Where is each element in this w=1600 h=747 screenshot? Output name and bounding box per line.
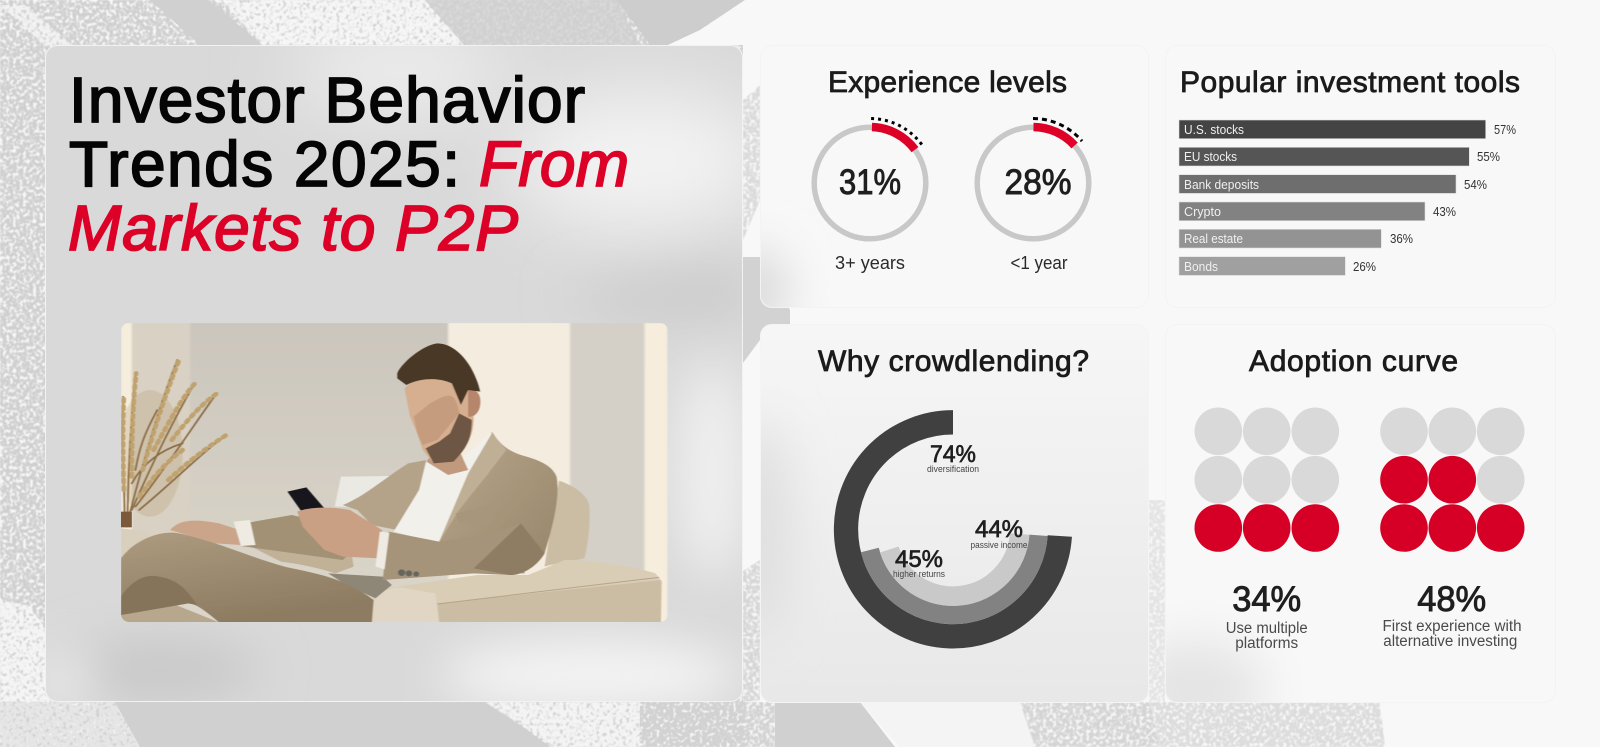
bar chart: Real estate — [1184, 232, 1243, 246]
stat: 34% use multiple platforms: Use multiple — [1226, 620, 1308, 637]
gauge: 28% less than 1 year: 28% — [1004, 163, 1072, 202]
bar chart: U.S. stocks — [1184, 123, 1244, 137]
bar chart: 55% — [1477, 150, 1500, 164]
radial chart: 45% — [895, 546, 943, 573]
dot grid: 48% — [1380, 408, 1524, 552]
bar chart: EU stocks — [1184, 150, 1237, 164]
stat: 48% first experience with alternative investing: alternative investing — [1383, 633, 1517, 650]
stat: 48% first experience with alternative investing: 48% — [1417, 580, 1486, 619]
panel: why crowdlending — [730, 324, 1149, 703]
plant — [117, 360, 226, 527]
bar chart: 26% — [1353, 260, 1376, 274]
photo: investor on sofa with phone — [117, 323, 667, 623]
heading: Experience levels — [828, 66, 1067, 99]
bar chart: Bonds — [1184, 260, 1218, 274]
bar chart: 57% — [1494, 123, 1516, 137]
stat: 34% use multiple platforms — [1226, 580, 1308, 652]
gauge: 28% less than 1 year: <1 year — [1010, 253, 1068, 273]
radial chart: higher returns — [893, 569, 945, 579]
radial chart: passive income — [970, 540, 1028, 550]
heading: Adoption curve — [1249, 345, 1458, 378]
radial chart — [846, 422, 1060, 636]
bar chart: Crypto — [1184, 205, 1221, 219]
gauge: 31% 3+ years: 31% — [839, 163, 901, 202]
radial chart: 74% — [930, 441, 976, 468]
gauge: 31% 3+ years: 3+ years — [835, 253, 905, 273]
gauge: 28% less than 1 year — [977, 118, 1089, 273]
title — [68, 64, 629, 264]
stat: 34% use multiple platforms: 34% — [1232, 580, 1301, 619]
bar chart: Bank deposits — [1184, 178, 1259, 192]
title: From — [479, 128, 629, 200]
bar chart: 54% — [1464, 178, 1487, 192]
gauge: 31% 3+ years — [814, 118, 926, 273]
panel: experience levels — [760, 70, 1092, 308]
bar chart: 43% — [1433, 205, 1456, 219]
panel: title and photo — [40, 30, 770, 711]
stat: 34% use multiple platforms: platforms — [1235, 635, 1298, 652]
dot grid: 34% — [1194, 408, 1339, 552]
heading: Why crowdlending? — [818, 345, 1089, 378]
title: Markets to P2P — [68, 192, 518, 264]
radial chart: 44% — [975, 516, 1023, 543]
stat: 48% first experience with alternative investing — [1382, 580, 1522, 650]
title: Investor Behavior — [69, 64, 585, 136]
bar chart: 36% — [1390, 232, 1413, 246]
title: Trends 2025: — [69, 128, 460, 200]
panel: adoption curve — [1166, 349, 1524, 703]
stat: 48% first experience with alternative investing: First experience with — [1382, 618, 1522, 635]
heading: Popular investment tools — [1180, 66, 1520, 99]
panel: popular investment tools — [1178, 70, 1520, 276]
radial chart: diversification — [927, 464, 979, 474]
bar chart — [1179, 120, 1516, 275]
